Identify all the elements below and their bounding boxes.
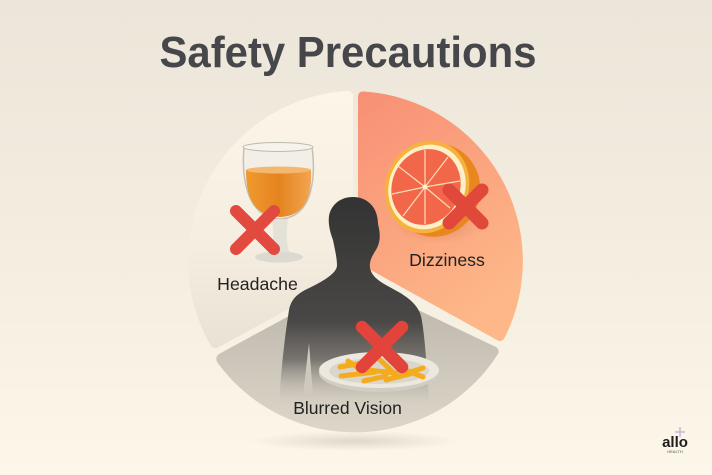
label: Blurred Vision: Blurred Vision (293, 398, 402, 418)
pie chart (188, 91, 523, 432)
icon: red cross on plate (362, 327, 402, 367)
icon: grapefruit (371, 128, 493, 250)
logo: allo health: allo (662, 434, 688, 451)
title: Safety Precautions (160, 28, 536, 77)
panel: headache segment (188, 91, 353, 348)
logo: allo health (662, 427, 688, 454)
label: Dizziness: Dizziness (409, 250, 485, 270)
arm gap (303, 343, 313, 396)
icon: red cross on glass (236, 211, 274, 249)
panel: blurred vision segment (216, 280, 499, 432)
icon: plate of fries (319, 352, 439, 392)
label: Headache: Headache (217, 274, 298, 294)
silhouette: person (279, 197, 429, 405)
ground shadow (250, 431, 460, 451)
icon: red cross on grapefruit (449, 190, 482, 223)
logo: allo health: HEALTH (667, 449, 683, 454)
panel: dizziness segment (358, 91, 523, 341)
icon: wine glass (243, 142, 313, 262)
